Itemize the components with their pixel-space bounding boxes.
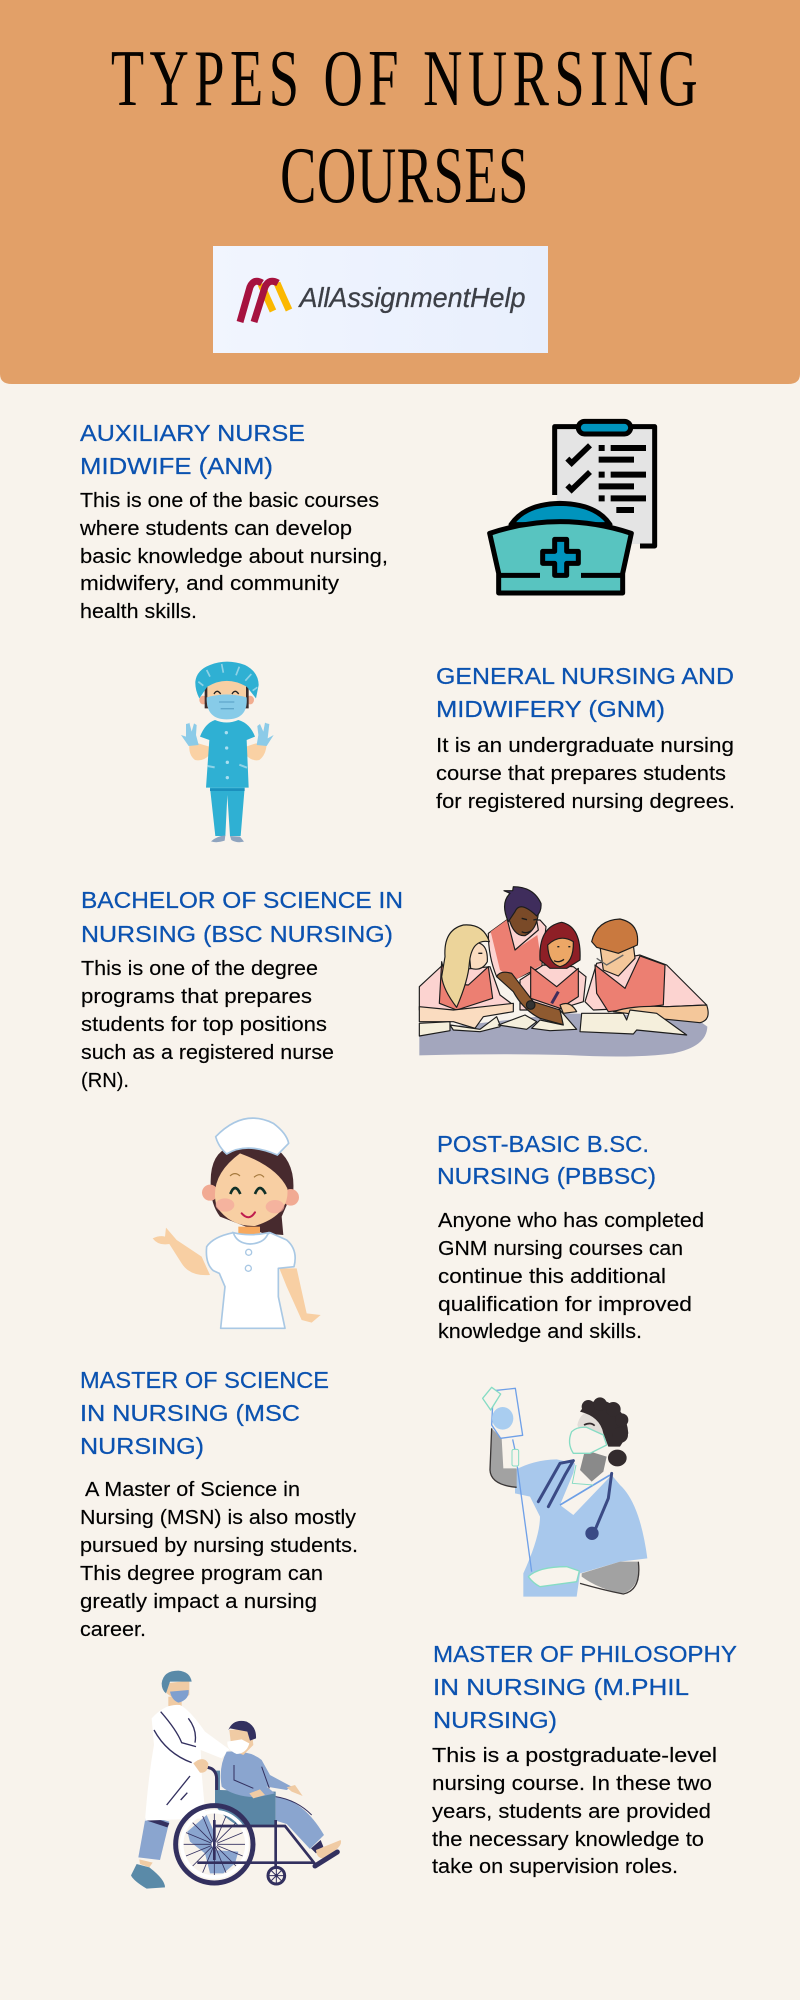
illustration: nurse pushing patient in wheelchair bbox=[131, 1671, 341, 1889]
chair frame bbox=[197, 1820, 314, 1872]
heading: PBBSC: POST-BASIC B.SC. bbox=[437, 1131, 649, 1157]
illustration: students studying at table bbox=[419, 887, 708, 1056]
heading: MSc Nursing: NURSING) bbox=[80, 1433, 204, 1459]
neck bbox=[580, 1450, 607, 1482]
text: MSc description: greatly impact a nursing bbox=[80, 1590, 317, 1613]
lower hand bbox=[528, 1567, 579, 1587]
text: GNM description: course that prepares students bbox=[436, 762, 726, 785]
scrubs bbox=[515, 1459, 647, 1597]
heading: M.Phil Nursing: NURSING) bbox=[433, 1707, 557, 1733]
IV bag bbox=[492, 1388, 523, 1438]
panel: General Nursing and Midwifery bbox=[436, 663, 735, 813]
text: MSc description bbox=[80, 1478, 358, 1641]
text: PBBSC description: knowledge and skills. bbox=[438, 1320, 642, 1343]
back student bbox=[488, 920, 546, 980]
text: ANM description: where students can develop bbox=[79, 517, 352, 540]
panel: Bachelor of Science in Nursing bbox=[81, 887, 403, 1092]
text: GNM description: for registered nursing degrees. bbox=[436, 790, 735, 813]
arms bbox=[189, 743, 209, 760]
heading: ANM: AUXILIARY NURSE bbox=[80, 420, 305, 446]
heading: GNM: GENERAL NURSING AND bbox=[436, 663, 734, 689]
title bbox=[111, 34, 698, 220]
text: M.Phil description: the necessary knowledge to bbox=[432, 1828, 704, 1851]
text: MSc description: career. bbox=[80, 1618, 146, 1641]
heading: PBBSC bbox=[437, 1131, 656, 1189]
books bbox=[419, 1022, 450, 1036]
panel: Auxiliary Nurse Midwife bbox=[79, 420, 388, 623]
heading: MSc Nursing: MASTER OF SCIENCE bbox=[80, 1367, 329, 1393]
text: PBBSC description: continue this additional bbox=[438, 1265, 666, 1288]
patient legs bbox=[276, 1797, 324, 1849]
heading: ANM bbox=[80, 420, 305, 479]
patient body bbox=[221, 1751, 292, 1797]
heading: PBBSC: NURSING (PBBSC) bbox=[437, 1163, 656, 1189]
middle student bbox=[520, 965, 586, 1010]
coat bbox=[145, 1705, 229, 1821]
arms bbox=[153, 1228, 210, 1275]
mask bbox=[570, 1427, 607, 1453]
heading: BSc Nursing: NURSING (BSC NURSING) bbox=[81, 921, 393, 947]
left student bbox=[419, 965, 513, 1010]
tunic bbox=[200, 720, 255, 788]
text: MSc description: This degree program can bbox=[80, 1562, 323, 1585]
text: PBBSC description bbox=[438, 1209, 704, 1343]
text: BSc description bbox=[81, 957, 334, 1092]
panel: Master of Philosophy in Nursing bbox=[432, 1641, 737, 1878]
illustration: nurse in white uniform bbox=[153, 1118, 321, 1328]
text: PBBSC description: Anyone who has completed bbox=[438, 1209, 704, 1232]
text: BSc description: such as a registered nurse bbox=[81, 1041, 334, 1064]
illustration: nurse in surgical scrubs bbox=[181, 662, 274, 842]
text: GNM description bbox=[436, 734, 735, 813]
icon: nurse cap and clipboard bbox=[490, 421, 655, 593]
face and hair bbox=[577, 1410, 605, 1450]
pointing arm bbox=[497, 972, 564, 1025]
heading: GNM: MIDWIFERY (GNM) bbox=[436, 696, 665, 722]
heading: GNM bbox=[436, 663, 734, 722]
logo: AllAssignmentHelp bbox=[213, 246, 548, 353]
faces bbox=[478, 918, 570, 962]
text: M.Phil description: nursing course. In these two bbox=[432, 1772, 712, 1795]
raised arm bbox=[490, 1428, 517, 1487]
text: ANM description: midwifery, and community bbox=[80, 572, 340, 595]
text: M.Phil description: This is a postgraduate-level bbox=[432, 1744, 717, 1767]
nurse legs bbox=[138, 1815, 169, 1860]
text: MSc description: A Master of Science in bbox=[85, 1478, 300, 1501]
panel: Master of Science in Nursing bbox=[80, 1367, 358, 1641]
wheel bbox=[176, 1806, 253, 1883]
text: BSc description: This is one of the degree bbox=[81, 957, 318, 980]
text: GNM description: It is an undergraduate nursing bbox=[436, 734, 734, 757]
nurse head bbox=[168, 1697, 182, 1706]
heading: M.Phil Nursing: IN NURSING (M.PHIL bbox=[433, 1674, 689, 1700]
uniform bbox=[206, 1233, 295, 1328]
heading: M.Phil Nursing: MASTER OF PHILOSOPHY bbox=[433, 1641, 737, 1667]
text: M.Phil description: take on supervision roles. bbox=[432, 1855, 678, 1878]
title: TYPES OF NURSING bbox=[111, 34, 698, 123]
text: ANM description bbox=[79, 489, 388, 623]
text: M.Phil description: years, students are provided bbox=[432, 1800, 711, 1823]
patient head bbox=[229, 1728, 253, 1755]
illustration: nurse holding IV bag bbox=[483, 1387, 647, 1597]
heading: MSc Nursing: IN NURSING (MSC bbox=[80, 1400, 300, 1426]
panel: Post-Basic B.Sc. Nursing bbox=[437, 1131, 704, 1343]
header banner bbox=[0, 0, 800, 384]
text: BSc description: (RN). bbox=[81, 1069, 129, 1092]
text: MSc description: Nursing (MSN) is also mostly bbox=[80, 1506, 357, 1529]
text: PBBSC description: qualification for improved bbox=[438, 1293, 692, 1316]
text: ANM description: basic knowledge about nursing, bbox=[80, 545, 388, 568]
heading: ANM: MIDWIFE (ANM) bbox=[80, 453, 273, 479]
heading: M.Phil Nursing bbox=[433, 1641, 737, 1733]
text: PBBSC description: GNM nursing courses can bbox=[438, 1237, 683, 1260]
text: ANM description: This is one of the basic courses bbox=[80, 489, 379, 512]
gloves bbox=[181, 723, 199, 746]
right student bbox=[585, 955, 707, 1010]
text: M.Phil description bbox=[432, 1744, 717, 1878]
heading: BSc Nursing bbox=[81, 887, 403, 947]
title: COURSES bbox=[280, 131, 528, 220]
text: ANM description: health skills. bbox=[80, 600, 197, 623]
logo: AllAssignmentHelp: AllAssignmentHelp bbox=[298, 282, 526, 313]
stethoscope bbox=[538, 1461, 612, 1530]
text: MSc description: pursued by nursing students. bbox=[80, 1534, 358, 1557]
text: BSc description: students for top positions bbox=[81, 1013, 327, 1036]
heading: MSc Nursing bbox=[80, 1367, 329, 1459]
trousers bbox=[210, 788, 245, 836]
heading: BSc Nursing: BACHELOR OF SCIENCE IN bbox=[81, 887, 403, 913]
text: BSc description: programs that prepares bbox=[81, 985, 312, 1008]
wheelchair back bbox=[215, 1771, 276, 1825]
